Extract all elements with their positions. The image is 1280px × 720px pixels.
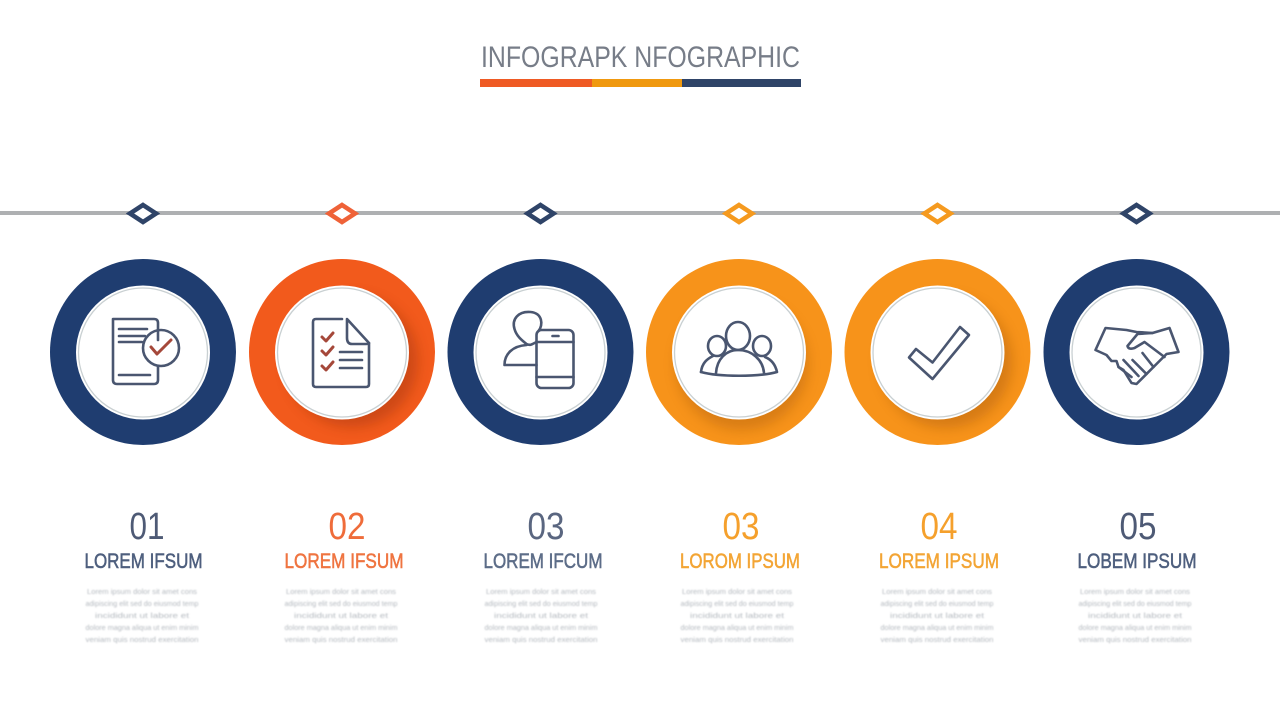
heading 05: LOBEM IPSUM — [1078, 550, 1196, 573]
circle 6: navy, handshake — [1044, 259, 1230, 445]
body text 03 — [484, 587, 598, 644]
body text 01: veniam quis nostrud exercitation — [86, 635, 198, 644]
circle 2: orange-red, checklist — [249, 259, 435, 445]
circle 1: navy, document with check — [50, 259, 236, 445]
diamond marker 4 — [726, 205, 752, 222]
body text 04: veniam quis nostrud exercitation — [880, 635, 994, 644]
body text 05: dolore magna aliqua ut enim minim — [1078, 623, 1192, 632]
body text 04: Lorem ipsum dolor sit amet cons — [882, 587, 992, 596]
body text 03: Lorem ipsum dolor sit amet cons — [486, 587, 596, 596]
body text 04 — [880, 587, 994, 644]
diamond marker 6 — [1124, 205, 1150, 222]
body text 03 amber: adipiscing elit sed do eiusmod temp — [680, 599, 794, 608]
step 03 (second) text — [680, 506, 800, 644]
body text 05: adipiscing elit sed do eiusmod temp — [1078, 599, 1192, 608]
number 03: 03 — [528, 506, 564, 548]
body text 01: adipiscing elit sed do eiusmod temp — [86, 599, 198, 608]
body text 04: incididunt ut labore et — [890, 611, 985, 620]
number 01: 01 — [130, 506, 164, 548]
icon: document with check badge — [113, 319, 179, 384]
timeline — [0, 205, 1280, 222]
body text 01: Lorem ipsum dolor sit amet cons — [87, 587, 197, 596]
body text 03: veniam quis nostrud exercitation — [484, 635, 598, 644]
body text 02: dolore magna aliqua ut enim minim — [284, 623, 398, 632]
heading 04: LOREM IPSUM — [879, 550, 999, 573]
step 04 text — [879, 506, 999, 644]
title underline: tri-colour bar — [480, 79, 801, 87]
icon: checklist document — [313, 319, 369, 387]
body text 02: incididunt ut labore et — [294, 611, 389, 620]
number 02: 02 — [328, 506, 366, 548]
number 05: 05 — [1120, 506, 1156, 548]
number 03 amber: 03 — [722, 506, 760, 548]
heading 03 amber: LOROM IPSUM — [680, 550, 800, 573]
body text 02: adipiscing elit sed do eiusmod temp — [284, 599, 398, 608]
body text 02 — [284, 587, 398, 644]
body text 03: adipiscing elit sed do eiusmod temp — [484, 599, 598, 608]
body text 03 amber: veniam quis nostrud exercitation — [680, 635, 794, 644]
icon: check mark outline — [909, 327, 969, 379]
body text 05: Lorem ipsum dolor sit amet cons — [1080, 587, 1190, 596]
heading 03: LOREM IFCUM — [484, 550, 602, 573]
body text 02: Lorem ipsum dolor sit amet cons — [286, 587, 396, 596]
circle 4: amber, team — [646, 259, 832, 445]
circle 5: amber, check mark — [844, 259, 1030, 445]
step 05 text — [1078, 506, 1196, 644]
icon: person and smartphone — [504, 312, 574, 388]
body text 04: dolore magna aliqua ut enim minim — [880, 623, 994, 632]
body text 04: adipiscing elit sed do eiusmod temp — [880, 599, 994, 608]
body text 03: dolore magna aliqua ut enim minim — [484, 623, 598, 632]
heading 01: LOREM IFSUM — [84, 550, 202, 573]
body text 03 amber: incididunt ut labore et — [690, 611, 785, 620]
body text 05: incididunt ut labore et — [1088, 611, 1183, 620]
heading 02: LOREM IFSUM — [284, 550, 404, 573]
diamond marker 2 — [329, 205, 355, 222]
body text 05: veniam quis nostrud exercitation — [1078, 635, 1192, 644]
step 02 text — [284, 506, 404, 644]
body text 01: incididunt ut labore et — [95, 611, 190, 620]
body text 02: veniam quis nostrud exercitation — [284, 635, 398, 644]
icon: handshake — [1096, 328, 1178, 384]
icon: group of people — [701, 322, 777, 376]
diamond marker 1 — [130, 205, 156, 222]
body text 03: incididunt ut labore et — [494, 611, 589, 620]
circle 3: navy, person with phone — [448, 259, 634, 445]
title — [480, 41, 801, 87]
body text 03 amber: Lorem ipsum dolor sit amet cons — [682, 587, 792, 596]
number 04: 04 — [920, 506, 958, 548]
body text 03 amber: dolore magna aliqua ut enim minim — [680, 623, 794, 632]
title: INFOGRAPK NFOGRAPHIC — [481, 41, 800, 74]
body text 01 — [86, 587, 198, 644]
step 01 text — [84, 506, 202, 644]
diamond marker 5 — [924, 205, 950, 222]
body text 03 amber — [680, 587, 794, 644]
body text 05 — [1078, 587, 1192, 644]
diamond marker 3 — [528, 205, 554, 222]
step 03 text — [484, 506, 602, 644]
body text 01: dolore magna aliqua ut enim minim — [86, 623, 198, 632]
